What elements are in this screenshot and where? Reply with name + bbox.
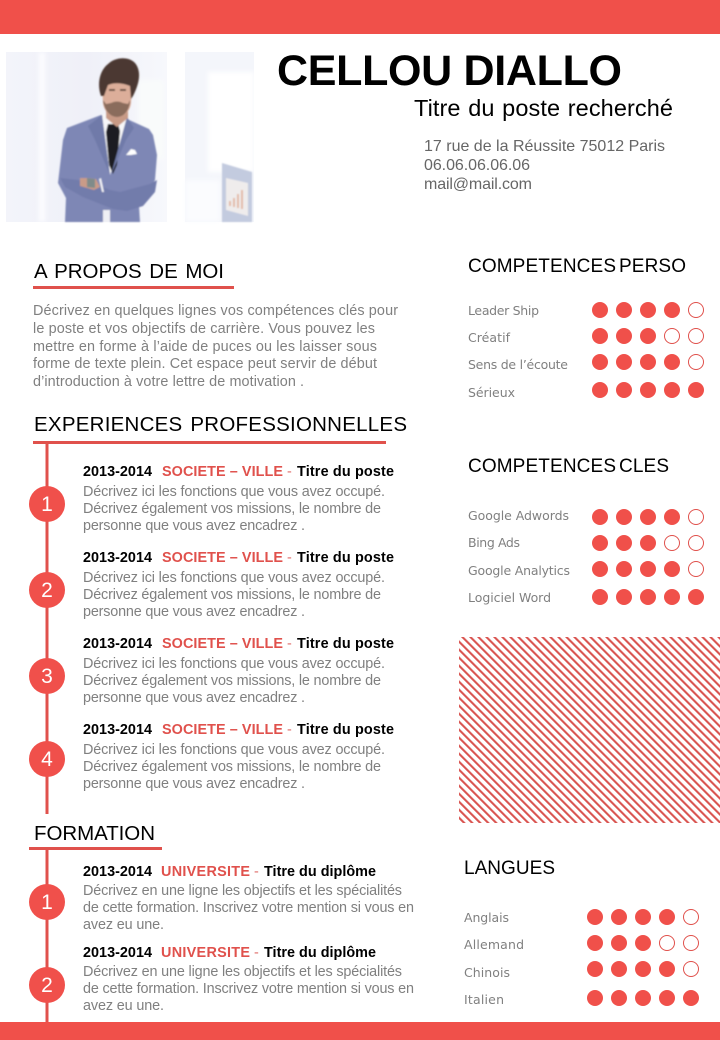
experience 2: SOCIETE – VILLE (162, 550, 283, 566)
experience 4: Décrivez ici les fonctions que vous avez occupé. (83, 742, 385, 758)
formation 2 (29, 945, 414, 1014)
experience 2: - (287, 550, 292, 566)
pocket square (126, 149, 137, 155)
skill: google adwords, 4 of 5 (468, 508, 704, 525)
experience 4: personne que vous avez encadrez . (83, 776, 305, 792)
experience 1: SOCIETE – VILLE (162, 464, 283, 480)
experience 1: - (287, 464, 292, 480)
experience 3: 3 (41, 665, 53, 688)
section: experiences professionnelles (29, 413, 407, 814)
experience 3: 2013-2014 (83, 636, 152, 652)
language: italien, 5 of 5: Italien (464, 992, 504, 1007)
contact details: mail@mail.com (424, 176, 532, 193)
language: anglais, 4 of 5: Anglais (464, 910, 509, 925)
lapels (88, 115, 134, 175)
experience 2: 2 (41, 579, 53, 602)
skill: sens de l'ecoute, 4 of 5 (468, 354, 704, 372)
photo: portrait of man in suit (6, 52, 254, 222)
experience 3: SOCIETE – VILLE (162, 636, 283, 652)
experience 2 (29, 550, 394, 620)
bottom shirt (103, 210, 110, 222)
experience 3: - (287, 636, 292, 652)
monitor (222, 163, 252, 222)
formation 2: Décrivez en une ligne les objectifs et les spécialités (83, 964, 402, 980)
formation 2: 2013-2014 (83, 945, 152, 961)
skill: bing ads, 3 of 5: Bing Ads (468, 535, 520, 550)
hatched decorative panel (459, 637, 720, 823)
tie (106, 124, 120, 174)
language: allemand, 3 of 5: Allemand (464, 937, 524, 952)
formation 2: 2 (41, 974, 53, 997)
formation 1: de cette formation. Inscrivez votre mention si vous en (83, 900, 414, 916)
heading: competences cles: CLES (619, 456, 669, 477)
heading: langues: LANGUES (464, 858, 555, 879)
heading: a propos de moi: A PROPOS DE MOI (34, 260, 224, 283)
skill: google analytics, 4 of 5 (468, 561, 704, 578)
skill: creatif, 3 of 5: Créatif (468, 330, 511, 345)
heading: formation: FORMATION (34, 822, 155, 845)
contact details (424, 138, 665, 193)
about text: forme de texte plein. Cet espace peut servir de début (33, 356, 377, 372)
about text: d’introduction à votre lettre de motivation . (33, 374, 304, 390)
experience 4: SOCIETE – VILLE (162, 722, 283, 738)
subtitle: job title: Titre du poste recherché (414, 95, 673, 121)
experience 1: 2013-2014 (83, 464, 152, 480)
skill: creatif, 3 of 5 (468, 328, 704, 345)
heading: competences perso: PERSO (619, 256, 686, 277)
experience 1: 1 (41, 493, 53, 516)
experience 4 (29, 722, 394, 792)
skill: leader ship, 4 of 5: Leader Ship (468, 303, 539, 318)
formation 2: avez eu une. (83, 998, 164, 1014)
panel: langues (464, 858, 699, 1007)
experience 1: Décrivez également vos missions, le nombre de (83, 501, 381, 517)
contact details: 17 rue de la Réussite 75012 Paris (424, 138, 665, 155)
formation 1: Décrivez en une ligne les objectifs et les spécialités (83, 883, 402, 899)
about text: mettre en forme à l’aide de puces ou les laisser sous (33, 339, 377, 355)
timeline line (46, 850, 48, 1022)
skill: google analytics, 4 of 5: Google Analytics (468, 563, 570, 578)
experience 2: personne que vous avez encadrez . (83, 604, 305, 620)
jacket (58, 115, 157, 222)
about text: Décrivez en quelques lignes vos compétences clés pour (33, 303, 398, 319)
experience 2: 2013-2014 (83, 550, 152, 566)
hair (99, 58, 139, 99)
experience 3: Titre du poste (297, 636, 394, 652)
crossed arms (60, 178, 157, 211)
formation 1: 2013-2014 (83, 864, 152, 880)
formation 1: avez eu une. (83, 917, 164, 933)
skill: serieux, 5 of 5: Sérieux (468, 385, 515, 400)
formation 1: - (254, 864, 259, 880)
experience 4: 2013-2014 (83, 722, 152, 738)
formation 1: Titre du diplôme (264, 864, 376, 880)
experience 3: Décrivez également vos missions, le nombre de (83, 673, 381, 689)
heading: competences cles: COMPETENCES (468, 456, 616, 477)
language: allemand, 3 of 5 (464, 935, 698, 952)
face (102, 77, 132, 117)
skill: sens de l'ecoute, 4 of 5: Sens de l’écoute (468, 357, 568, 372)
formation 1: 1 (41, 891, 53, 914)
panel: competences perso (468, 256, 704, 400)
language: anglais, 4 of 5 (464, 909, 698, 925)
skill: bing ads, 3 of 5 (468, 535, 704, 551)
timeline line (46, 444, 48, 814)
skill: logiciel word, 5 of 5: Logiciel Word (468, 590, 551, 605)
experience 1 (29, 464, 394, 534)
experience 4: Décrivez également vos missions, le nombre de (83, 759, 381, 775)
title: name: CELLOU DIALLO (277, 47, 622, 95)
section: a propos de moi (33, 260, 398, 390)
heading: competences perso: COMPETENCES (468, 256, 616, 277)
about text (33, 303, 398, 390)
formation 2: UNIVERSITE (161, 945, 250, 961)
experience 4: - (287, 722, 292, 738)
experience 2: Décrivez ici les fonctions que vous avez occupé. (83, 570, 385, 586)
formation 2: Titre du diplôme (264, 945, 376, 961)
skill: serieux, 5 of 5 (468, 382, 704, 400)
formation 2: - (254, 945, 259, 961)
experience 4: Titre du poste (297, 722, 394, 738)
bottom banner (0, 1022, 720, 1040)
experience 1: Décrivez ici les fonctions que vous avez occupé. (83, 484, 385, 500)
experience 4: 4 (41, 748, 53, 771)
experience 1: personne que vous avez encadrez . (83, 518, 305, 534)
experience 3: Décrivez ici les fonctions que vous avez occupé. (83, 656, 385, 672)
experience 3: personne que vous avez encadrez . (83, 690, 305, 706)
panel: competences cles (468, 456, 704, 605)
skill: leader ship, 4 of 5 (468, 302, 704, 318)
skill: google adwords, 4 of 5: Google Adwords (468, 508, 569, 523)
experience 3 (29, 636, 394, 706)
section: formation (29, 822, 414, 1022)
language: chinois, 4 of 5 (464, 961, 698, 980)
top banner (0, 0, 720, 34)
formation 1 (29, 864, 414, 933)
neck and beard (106, 105, 128, 127)
heading: experiences professionnelles: EXPERIENCES PROFESSIONNELLES (34, 413, 407, 436)
shirt (102, 112, 127, 175)
language: chinois, 4 of 5: Chinois (464, 965, 510, 980)
experience 2: Décrivez également vos missions, le nombre de (83, 587, 381, 603)
skill: logiciel word, 5 of 5 (468, 589, 704, 605)
experience 2: Titre du poste (297, 550, 394, 566)
experience 1: Titre du poste (297, 464, 394, 480)
language: italien, 5 of 5 (464, 990, 699, 1007)
formation 1: UNIVERSITE (161, 864, 250, 880)
about text: le poste et vos objectifs de carrière. Vous pouvez les (33, 321, 375, 337)
formation 2: de cette formation. Inscrivez votre mention si vous en (83, 981, 414, 997)
contact details: 06.06.06.06.06 (424, 157, 530, 174)
